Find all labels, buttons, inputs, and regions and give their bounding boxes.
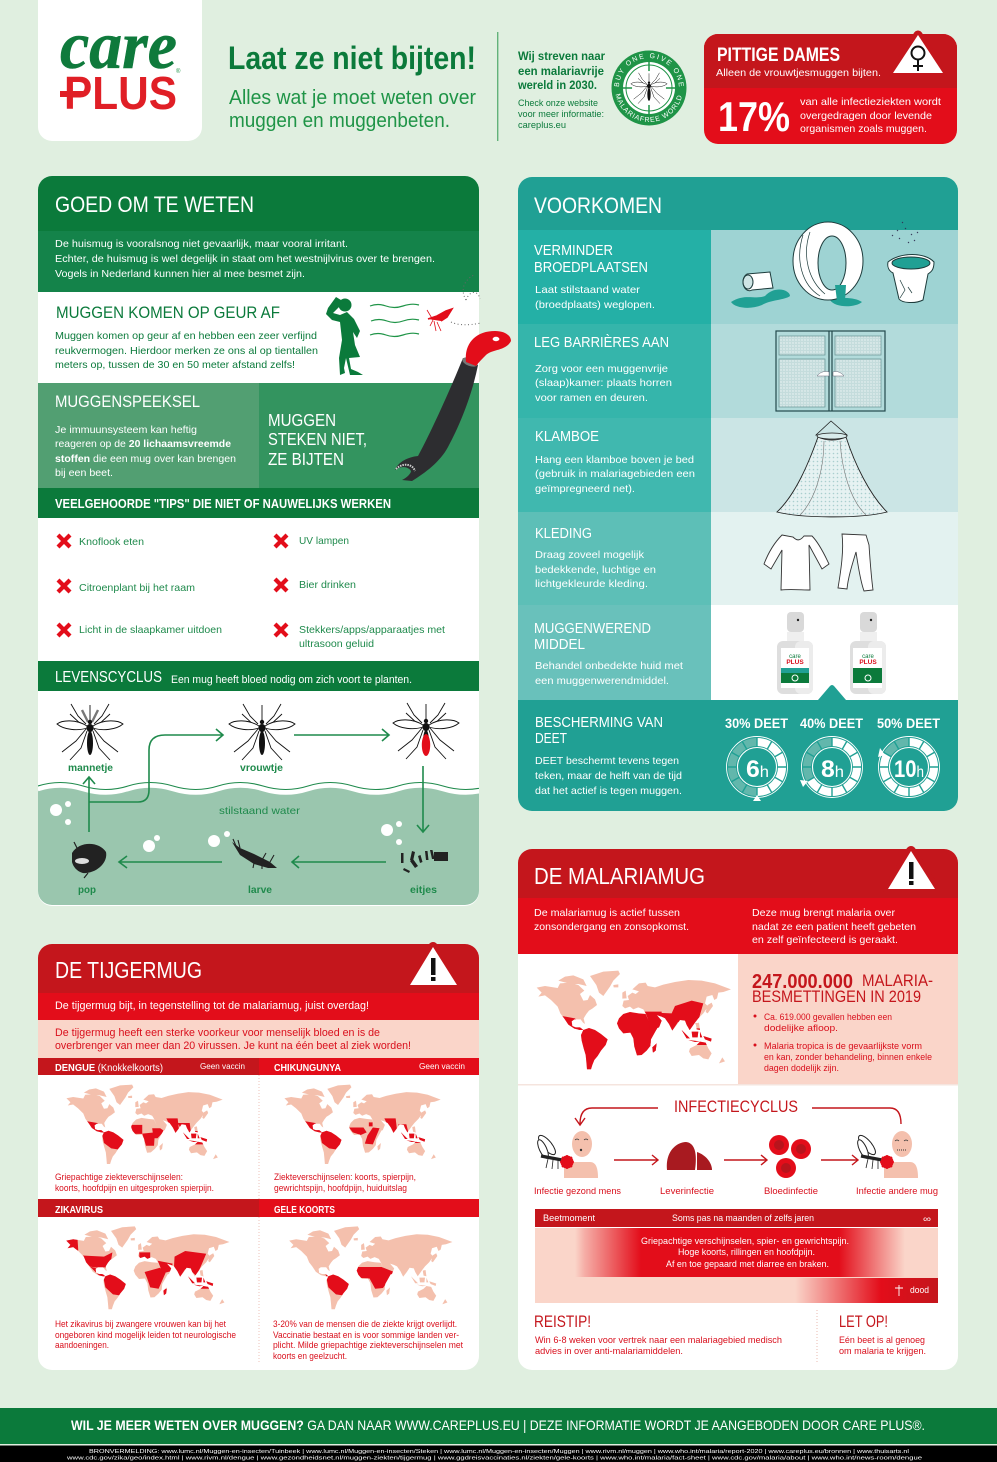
disease: chikungunya: CHIKUNGUNYA [274, 1063, 341, 1074]
row: klamboe: KLAMBOE [535, 429, 599, 445]
badge: malaria free world [612, 50, 686, 126]
disease: dengue [38, 1058, 259, 1194]
block: statistics: en kan, zonder behandeling, binnen enkele [764, 1052, 932, 1063]
logo card [38, 0, 202, 141]
mission statement: voor meer informatie: [518, 109, 604, 120]
logo card: PLUS [64, 67, 177, 119]
icon: warning triangle [410, 947, 457, 985]
text: huismug [55, 238, 435, 280]
heading: tips [38, 488, 479, 518]
heading: goed om te weten: GOED OM TE WETEN [55, 192, 254, 217]
icon: can, tyre, pot [731, 222, 934, 308]
chart: symptom timeline: dood [910, 1285, 929, 1296]
icon: eggs [401, 850, 448, 873]
chart: symptom timeline: ∞ [923, 1214, 931, 1225]
labels: life cycle: pop [78, 884, 96, 896]
row: verminder broedplaatsen: Laat stilstaand water [535, 284, 641, 296]
disease: chikungunya: Ziekteverschijnselen: koorts, spierpijn, [274, 1172, 416, 1183]
block: statistics: 247.000.000 [752, 971, 853, 993]
chart: symptom timeline: Beetmoment [543, 1213, 595, 1224]
list: tips: ultrasoon geluid [299, 638, 374, 650]
list: tips: Licht in de slaapkamer uitdoen [79, 624, 222, 636]
icon: liver [667, 1142, 712, 1170]
heading: voorkomen: VOORKOMEN [534, 193, 662, 218]
gauge: 50% deet 10h [877, 715, 940, 798]
chart: symptom timeline: Soms pas na maanden of zelfs jaren [672, 1213, 814, 1224]
text: geur: Muggen komen op geur af en hebben een zeer verfijnd [55, 330, 317, 342]
callout: reistip: REISTIP! [534, 1312, 591, 1331]
disease: gele koorts: plicht. Milde griepachtige ziekteverschijnselen met [273, 1340, 463, 1351]
text: overdracht [752, 907, 916, 946]
block: muggenspeeksel: reageren op de 20 lichaamsvreemde [55, 438, 231, 450]
panel: pittige dames: van alle infectieziekten wordt [800, 96, 941, 108]
callout: let op [839, 1312, 926, 1357]
map: gele koorts [289, 1226, 452, 1309]
icon: spray bottle 1: PLUS [786, 659, 804, 666]
block: muggenspeeksel: MUGGENSPEEKSEL [55, 392, 200, 411]
subtitle: Alles wat je moet weten over [229, 87, 476, 109]
callout: reistip [534, 1312, 782, 1357]
row: bescherming van deet: DEET [535, 731, 567, 747]
text: overdracht: en zelf geïnfecteerd is geraakt. [752, 934, 898, 946]
footer banner: WIL JE MEER WETEN OVER MUGGEN? GA DAN NAAR WWW.CAREPLUS.EU | DEZE INFORMATIE WORDT JE AANGEBODEN DOOR CARE PLUS®. [71, 1417, 925, 1433]
disease: chikungunya [259, 1058, 479, 1194]
callout: reistip: Win 6-8 weken voor vertrek naar een malariagebied medisch [535, 1335, 782, 1346]
panel: pittige dames: PITTIGE DAMES [717, 45, 840, 66]
labels: infection cycle [534, 1186, 938, 1197]
list: tips: Bier drinken [299, 579, 356, 591]
row: muggenwerend middel: Behandel onbedekte huid met [535, 660, 683, 672]
chart: symptom timeline: Af en toe gepaard met diarree en braken. [666, 1259, 829, 1270]
icon: spray bottle 1: care [789, 654, 801, 660]
text: actief [534, 907, 689, 933]
disease: zikavirus: ongeboren kind mogelijk leiden tot neurologische [55, 1330, 236, 1341]
row: kleding: bedekkende, luchtige en [535, 564, 656, 576]
labels: life cycle: vrouwtje [240, 762, 283, 774]
heading: levenscyclus: Een mug heeft bloed nodig om zich voort te planten. [171, 674, 412, 686]
panel: voorkomen [518, 177, 958, 811]
disease: gele koorts [259, 1199, 479, 1362]
gauge: 30% deet 6h: 30% DEET [725, 715, 788, 731]
icon: window with screens [776, 331, 885, 411]
row: leg barrieres aan: LEG BARRIÈRES AAN [534, 334, 669, 351]
gauge: 40% deet 8h: 40% DEET [800, 715, 863, 731]
logo card: care [60, 7, 177, 83]
panel: de tijgermug [38, 944, 479, 1370]
labels: life cycle: mannetje [68, 762, 113, 774]
gauge: 40% deet 8h [800, 715, 863, 798]
disease: zikavirus: ZIKAVIRUS [55, 1204, 103, 1216]
text: geur: reukvermogen. Hierdoor merken ze ons al op tientallen [55, 345, 318, 357]
callout: let op: om malaria te krijgen. [839, 1346, 926, 1357]
list: tips: Knoflook eten [79, 536, 144, 548]
heading: levenscyclus [38, 661, 479, 691]
labels: life cycle: stilstaand water [219, 805, 301, 817]
panel: pittige dames [704, 34, 957, 144]
row: leg barrieres aan: voor ramen en deuren. [535, 392, 648, 404]
icon: spray bottle 2: care [862, 654, 874, 660]
title: Laat ze niet bijten! [228, 40, 476, 76]
icon: infected person bitten [856, 1131, 918, 1178]
row: bescherming van deet: BESCHERMING VAN [535, 715, 663, 731]
row: bescherming van deet: DEET beschermt tevens tegen [535, 755, 679, 767]
mission statement: Wij streven naar [518, 51, 606, 63]
labels: infection cycle: Infectie gezond mens [534, 1186, 621, 1197]
map: zikavirus [63, 1226, 229, 1309]
subtitle [229, 87, 476, 132]
labels: infection cycle: Bloedinfectie [764, 1186, 818, 1197]
icon: blood cells [769, 1135, 811, 1178]
icon: person drinking [326, 297, 363, 375]
row: klamboe: geïmpregneerd net). [535, 483, 635, 495]
labels: infection cycle: Infectie andere mug [856, 1186, 938, 1197]
disease: zikavirus [38, 1199, 259, 1351]
text: actief: zonsondergang en zonsopkomst. [534, 921, 689, 933]
row: muggenwerend middel: MUGGENWEREND [534, 621, 651, 637]
map: dengue [66, 1085, 223, 1164]
row: bescherming van deet: teken, maar de helft van de tijd [535, 770, 682, 782]
icon: spray bottle 1 [777, 612, 813, 694]
map: malaria [537, 971, 731, 1072]
mission statement: careplus.eu [518, 120, 566, 131]
disease: dengue: Griepachtige ziekteverschijnselen: [55, 1172, 183, 1183]
labels: life cycle: larve [248, 884, 272, 896]
gauge: 50% deet 10h: 50% DEET [877, 715, 940, 731]
icon: fed mosquito [393, 703, 459, 759]
row: leg barrieres aan: (slaap)kamer: plaats horren [535, 377, 672, 389]
row: kleding: lichtgekleurde kleding. [535, 578, 648, 590]
text: huismug: Echter, de huismug is wel degelijk in staat om het westnijlvirus over te brengen. [55, 253, 435, 265]
row: verminder broedplaatsen [518, 222, 958, 324]
sources bar: BRONVERMELDING: www.lumc.nl/Muggen-en-insecten/Tuinbeek | www.lumc.nl/Muggen-en-insecten/Steken | www.lumc.nl/Muggen-en-insecten/Muggen | www.rivm.nl/muggen | www.who.int/malaria/report-2020 | www.careplus.eu/bronnen | www.thuisarts.nl [89, 1449, 909, 1455]
row: klamboe: Hang een klamboe boven je bed [535, 454, 694, 466]
mission statement: wereld in 2030. [517, 80, 597, 92]
row: klamboe: (gebruik in malariagebieden een [535, 468, 695, 480]
text: voorkeur: De tijgermug heeft een sterke voorkeur voor menselijk bloed en is de [55, 1027, 380, 1039]
icon: female mosquito [229, 704, 295, 760]
heading: tips: VEELGEHOORDE "TIPS" DIE NIET OF NAUWELIJKS WERKEN [55, 497, 391, 511]
block: statistics: MALARIA- [862, 971, 933, 990]
icon: spray bottle 2 [850, 612, 886, 694]
panel: de malariamug [518, 849, 958, 1370]
labels: life cycle [68, 762, 437, 896]
cycle arrows [83, 729, 429, 868]
heading: de tijgermug: DE TIJGERMUG [55, 957, 202, 983]
row: muggenwerend middel: een muggenwerendmiddel. [535, 675, 669, 687]
text: geur [55, 330, 318, 371]
row: verminder broedplaatsen: BROEDPLAATSEN [534, 260, 648, 276]
text: actief: De malariamug is actief tussen [534, 907, 680, 919]
row: bescherming van deet [518, 685, 958, 811]
icon: shirt and trousers [764, 534, 873, 591]
row: kleding: KLEDING [535, 526, 592, 542]
disease: dengue: koorts, hoofdpijn en uitgesproken spierpijn. [55, 1183, 214, 1194]
callout: reistip: advies in over anti-malariamiddelen. [535, 1346, 683, 1357]
block: muggen steken niet: MUGGEN [268, 410, 336, 430]
heading: levenscyclus: LEVENSCYCLUS [55, 669, 162, 686]
heading: infectiecyclus: INFECTIECYCLUS [674, 1097, 798, 1116]
icon: spray bottle 2: PLUS [859, 659, 877, 666]
text: overdag: De tijgermug bijt, in tegenstelling tot de malariamug, juist overdag! [55, 1000, 369, 1012]
chart: symptom timeline: Hoge koorts, rillingen en hoofdpijn. [678, 1247, 815, 1258]
callout: let op: Eén beet is al genoeg [839, 1335, 925, 1346]
disease: gele koorts: 3-20% van de mensen die de ziekte krijgt overlijdt. [273, 1319, 457, 1330]
block: muggen steken niet: STEKEN NIET, [268, 429, 367, 449]
row: leg barrieres aan: Zorg voor een muggenvrije [535, 363, 668, 375]
callout: let op: LET OP! [839, 1312, 888, 1331]
heading: muggen komen op geur af: MUGGEN KOMEN OP GEUR AF [56, 303, 280, 322]
row: muggenwerend middel: MIDDEL [534, 637, 585, 653]
list: tips: Citroenplant bij het raam [79, 582, 195, 594]
subtitle: muggen en muggenbeten. [229, 110, 450, 132]
panel: pittige dames: Alleen de vrouwtjesmuggen bijten. [716, 67, 881, 79]
chart: life cycle [38, 703, 488, 910]
panel: pittige dames: overgedragen door levende [800, 110, 932, 122]
logo card: ® [176, 68, 181, 75]
disease: chikungunya: gewrichtspijn, hoofdpijn, huiduitslag [274, 1183, 407, 1194]
sources bar: www.cdc.gov/zika/geo/index.html | www.rivm.nl/dengue | www.gezondheidsnet.nl/muggen-ziekten/tijgermug | www.ggdreisvaccinaties.nl/ziekten/gele-koorts | www.who.int/malaria/fact-sheet | www.cdc.gov/malaria/about | www.who.int/news-room/dengue [67, 1456, 922, 1462]
block: statistics: Ca. 619.000 gevallen hebben een [764, 1012, 892, 1023]
list: tips: UV lampen [299, 535, 349, 547]
disease: gele koorts: GELE KOORTS [274, 1204, 335, 1216]
panel: pittige dames: 17% [718, 93, 790, 140]
disease: chikungunya: Geen vaccin [419, 1061, 465, 1071]
mission statement: Check onze website [518, 98, 598, 109]
block: statistics: BESMETTINGEN IN 2019 [752, 987, 921, 1006]
labels: life cycle: eitjes [410, 884, 437, 896]
disease: gele koorts: koorts en geelzucht. [273, 1351, 347, 1362]
row: verminder broedplaatsen: VERMINDER [534, 243, 613, 259]
row: klamboe [518, 418, 958, 605]
row: verminder broedplaatsen: (broedplaats) weglopen. [535, 299, 655, 311]
bubbles [50, 801, 402, 852]
map: chikungunya [284, 1085, 441, 1164]
panel: pittige dames: organismen zoals muggen. [800, 123, 927, 135]
gauge: 30% deet 6h: 6h [746, 756, 769, 783]
block: statistics: dagen dodelijk zijn. [764, 1063, 839, 1074]
footer banner [0, 1408, 997, 1446]
text: huismug: De huismug is vooralsnog niet gevaarlijk, maar vooral irritant. [55, 238, 348, 250]
badge: malaria free world: BUY ONE GIVE ONE [614, 53, 684, 87]
disease: dengue: DENGUE (Knokkelkoorts) [55, 1063, 163, 1074]
mission statement: een malariavrije [518, 66, 604, 78]
disease: dengue: Geen vaccin [200, 1061, 245, 1071]
gauge: 30% deet 6h [725, 715, 788, 801]
icon: healthy person bitten [536, 1131, 598, 1178]
block: statistics [738, 954, 958, 1084]
icon: warning triangle [888, 851, 935, 889]
block: statistics: dodelijke afloop. [764, 1023, 838, 1034]
icon: mosquito mouth with blood [395, 331, 511, 481]
heading: de malariamug: DE MALARIAMUG [534, 863, 705, 889]
disease: zikavirus: Het zikavirus bij zwangere vrouwen kan bij het [55, 1319, 226, 1330]
list: tips: Stekkers/apps/apparaatjes met [299, 624, 445, 636]
block: statistics: Malaria tropica is de gevaarlijkste vorm [764, 1041, 922, 1052]
labels: infection cycle: Leverinfectie [660, 1186, 714, 1197]
text: geur: meters op, tussen de 30 en 50 meter afstand zelfs! [55, 359, 295, 371]
text: overdracht: nadat ze een patient heeft gebeten [752, 921, 916, 933]
gauge: 50% deet 10h: 10h [894, 756, 924, 783]
block: muggenspeeksel: Je immuunsysteem kan heftig [55, 424, 197, 436]
block: muggen steken niet [259, 383, 479, 488]
icon: male mosquito [57, 704, 123, 760]
icon: mosquito net [777, 421, 887, 517]
panel: goed om te weten [38, 176, 511, 910]
chart: symptom timeline [535, 1209, 938, 1303]
block: muggen steken niet: ZE BIJTEN [268, 449, 344, 469]
row: leg barrieres aan [518, 324, 958, 418]
row: kleding [518, 512, 873, 605]
block: muggenspeeksel: stoffen die een mug over kan brengen [55, 453, 236, 465]
block: muggenspeeksel: bij een beet. [55, 467, 113, 479]
row: muggenwerend middel [518, 605, 958, 700]
mission statement [517, 51, 606, 131]
sources bar [0, 1446, 997, 1462]
disease: gele koorts: Vaccinatie bestaat en is voor sommige landen ver- [273, 1330, 459, 1341]
icon: pupa [72, 842, 106, 878]
badge: malaria free world: MALARIAFREE WORLD [616, 94, 682, 122]
arrows: infection cycle [575, 1108, 901, 1165]
block: muggenspeeksel [38, 383, 259, 488]
text: overdracht: Deze mug brengt malaria over [752, 907, 896, 919]
row: bescherming van deet: dat het actief is tegen muggen. [535, 785, 682, 797]
text: huismug: Vogels in Nederland kunnen hier al mee besmet zijn. [55, 268, 305, 280]
chart: symptom timeline: Griepachtige verschijnselen, spier- en gewrichtspijn. [641, 1236, 849, 1247]
gauge: 40% deet 8h: 8h [821, 756, 844, 783]
disease: zikavirus: aandoeningen. [55, 1340, 109, 1351]
list: tips [58, 535, 445, 650]
icon: scent waves [370, 304, 419, 336]
text: voorkeur: overbrenger van meer dan 20 virussen. Je kunt na één beet al ziek worden! [55, 1040, 411, 1052]
text: voorkeur [55, 1027, 411, 1052]
row: kleding: Draag zoveel mogelijk [535, 549, 645, 561]
icon: larva [232, 839, 277, 869]
icon: red mosquito and flight path [427, 275, 481, 331]
